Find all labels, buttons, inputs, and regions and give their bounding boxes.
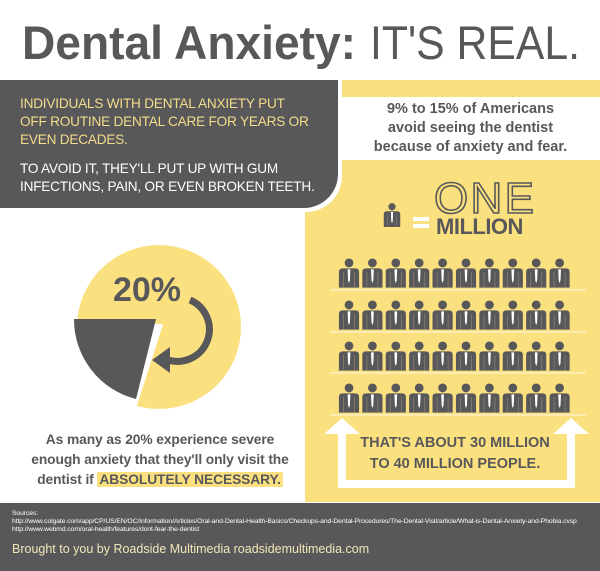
sources: Sources: — [12, 510, 38, 517]
white stat box — [341, 97, 600, 160]
title: IT'S REAL. — [370, 16, 580, 69]
legend: one person = one million — [384, 176, 534, 239]
equals — [413, 217, 429, 221]
pie chart — [74, 245, 241, 409]
percent label: 20% — [113, 271, 181, 309]
callout: 30-40 million: TO 40 MILLION PEOPLE. — [370, 456, 540, 472]
yellow background panel — [305, 80, 600, 502]
intro text yellow: INDIVIDUALS WITH DENTAL ANXIETY PUT — [20, 96, 285, 111]
caption 20%: As many as 20% experience severe — [46, 432, 274, 447]
icon: person — [384, 203, 400, 227]
callout: 30-40 million — [360, 435, 550, 472]
footer — [0, 503, 600, 571]
MILLION: MILLION — [436, 214, 523, 239]
icon: curved arrow — [168, 300, 209, 361]
sources: http://www.webmd.com/oral-health/features/dont-fear-the-dentist — [12, 526, 199, 533]
caption 20%: enough anxiety that they'll only visit the — [31, 452, 289, 467]
intro text yellow: EVEN DECADES. — [20, 132, 128, 147]
white stat box: avoid seeing the dentist — [388, 120, 553, 136]
white stat box: 9% to 15% of Americans — [387, 101, 554, 117]
title — [22, 16, 580, 69]
intro text yellow — [20, 96, 309, 147]
intro text yellow: OFF ROUTINE DENTAL CARE FOR YEARS OR — [20, 114, 309, 129]
intro text white: TO AVOID IT, THEY'LL PUT UP WITH GUM — [20, 161, 278, 176]
caption 20% — [31, 432, 289, 487]
panel: intro dark — [0, 80, 338, 208]
credit: Brought to you by Roadside Multimedia roadsidemultimedia.com — [12, 542, 369, 556]
arrow: white U bracket — [324, 418, 589, 488]
caption 20%: dentist if ABSOLUTELY NECESSARY. — [37, 472, 281, 487]
sources: http://www.colgate.com/app/CP/US/EN/OC/Information/Articles/Oral-and-Dental-Health-Basics/Checkups-and-Dental-Procedures/The-Dental-Visit/article/What-is-Dental-Anxiety-and-Phobia.cvsp — [12, 518, 577, 525]
sources — [12, 510, 577, 533]
intro text white — [20, 161, 315, 194]
white stat box: because of anxiety and fear. — [374, 139, 567, 155]
people grid — [330, 258, 586, 416]
intro text white: INFECTIONS, PAIN, OR EVEN BROKEN TEETH. — [20, 179, 315, 194]
title: Dental Anxiety: — [22, 16, 356, 69]
callout: 30-40 million: THAT'S ABOUT 30 MILLION — [360, 435, 550, 451]
